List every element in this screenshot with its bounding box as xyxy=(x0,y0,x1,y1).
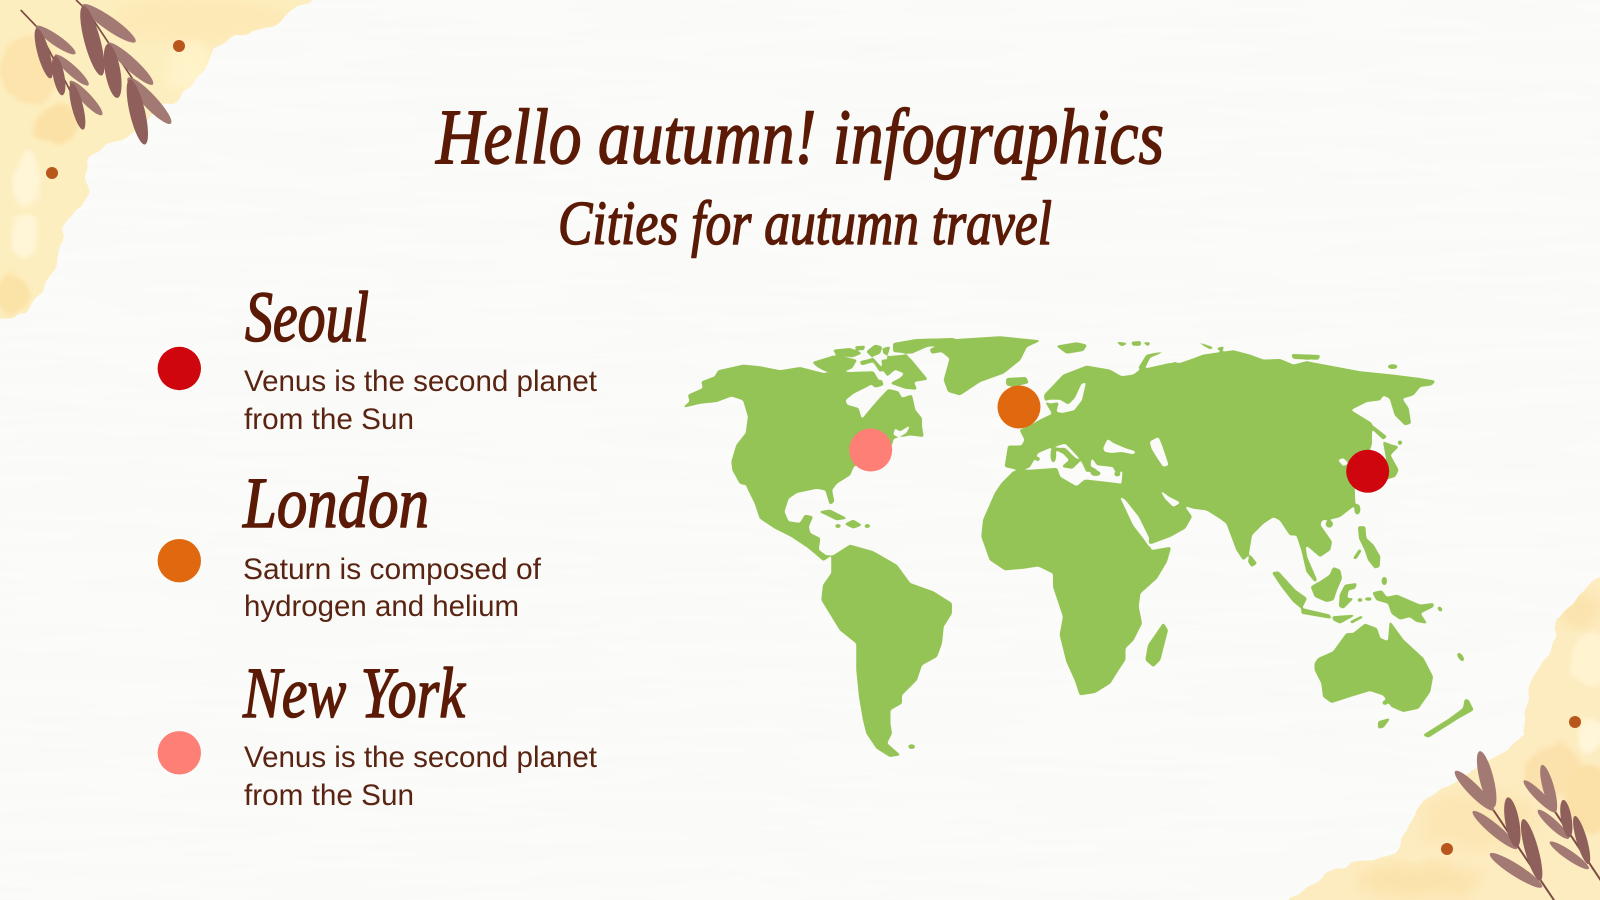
icon: bottom right leaves xyxy=(1451,749,1600,900)
heading: New York: New York xyxy=(242,653,467,733)
map marker: Seoul xyxy=(1346,450,1389,493)
icon: bottom right dots xyxy=(1441,716,1581,855)
map marker: New York xyxy=(849,428,892,472)
subtitle: Cities for autumn travel xyxy=(558,190,1052,258)
legend item: New York xyxy=(158,653,598,812)
legend item: London xyxy=(158,463,542,623)
text block: Seoul description: Venus is the second planet xyxy=(244,365,598,398)
map marker: London xyxy=(998,386,1040,428)
legend item: Seoul xyxy=(158,277,598,436)
map: Eurasia, Africa and Oceania xyxy=(982,341,1473,737)
text block: London description: Saturn is composed of xyxy=(243,553,542,586)
text block: Seoul description: from the Sun xyxy=(244,403,414,436)
icon: top left dots xyxy=(46,40,185,179)
icon: top left leaves xyxy=(21,0,176,146)
legend marker: New York xyxy=(158,731,201,774)
text block: New York description xyxy=(244,741,598,812)
text block: London description xyxy=(243,553,542,623)
watercolor corner: bottom right xyxy=(1288,577,1600,900)
text block: New York description: Venus is the second planet xyxy=(244,741,598,774)
text block: Seoul description xyxy=(244,365,598,436)
map: land masses xyxy=(683,337,1473,757)
legend marker: London xyxy=(158,539,201,582)
heading: London: London xyxy=(242,463,429,543)
world map xyxy=(683,337,1473,757)
title: Hello autumn! infographics xyxy=(435,93,1164,180)
map: Americas and Greenland xyxy=(683,337,1087,757)
legend marker: Seoul xyxy=(158,347,201,390)
text block: London description: hydrogen and helium xyxy=(244,590,519,623)
text block: New York description: from the Sun xyxy=(244,779,414,812)
watercolor corner: top left xyxy=(0,0,312,319)
heading: Seoul: Seoul xyxy=(245,277,369,357)
